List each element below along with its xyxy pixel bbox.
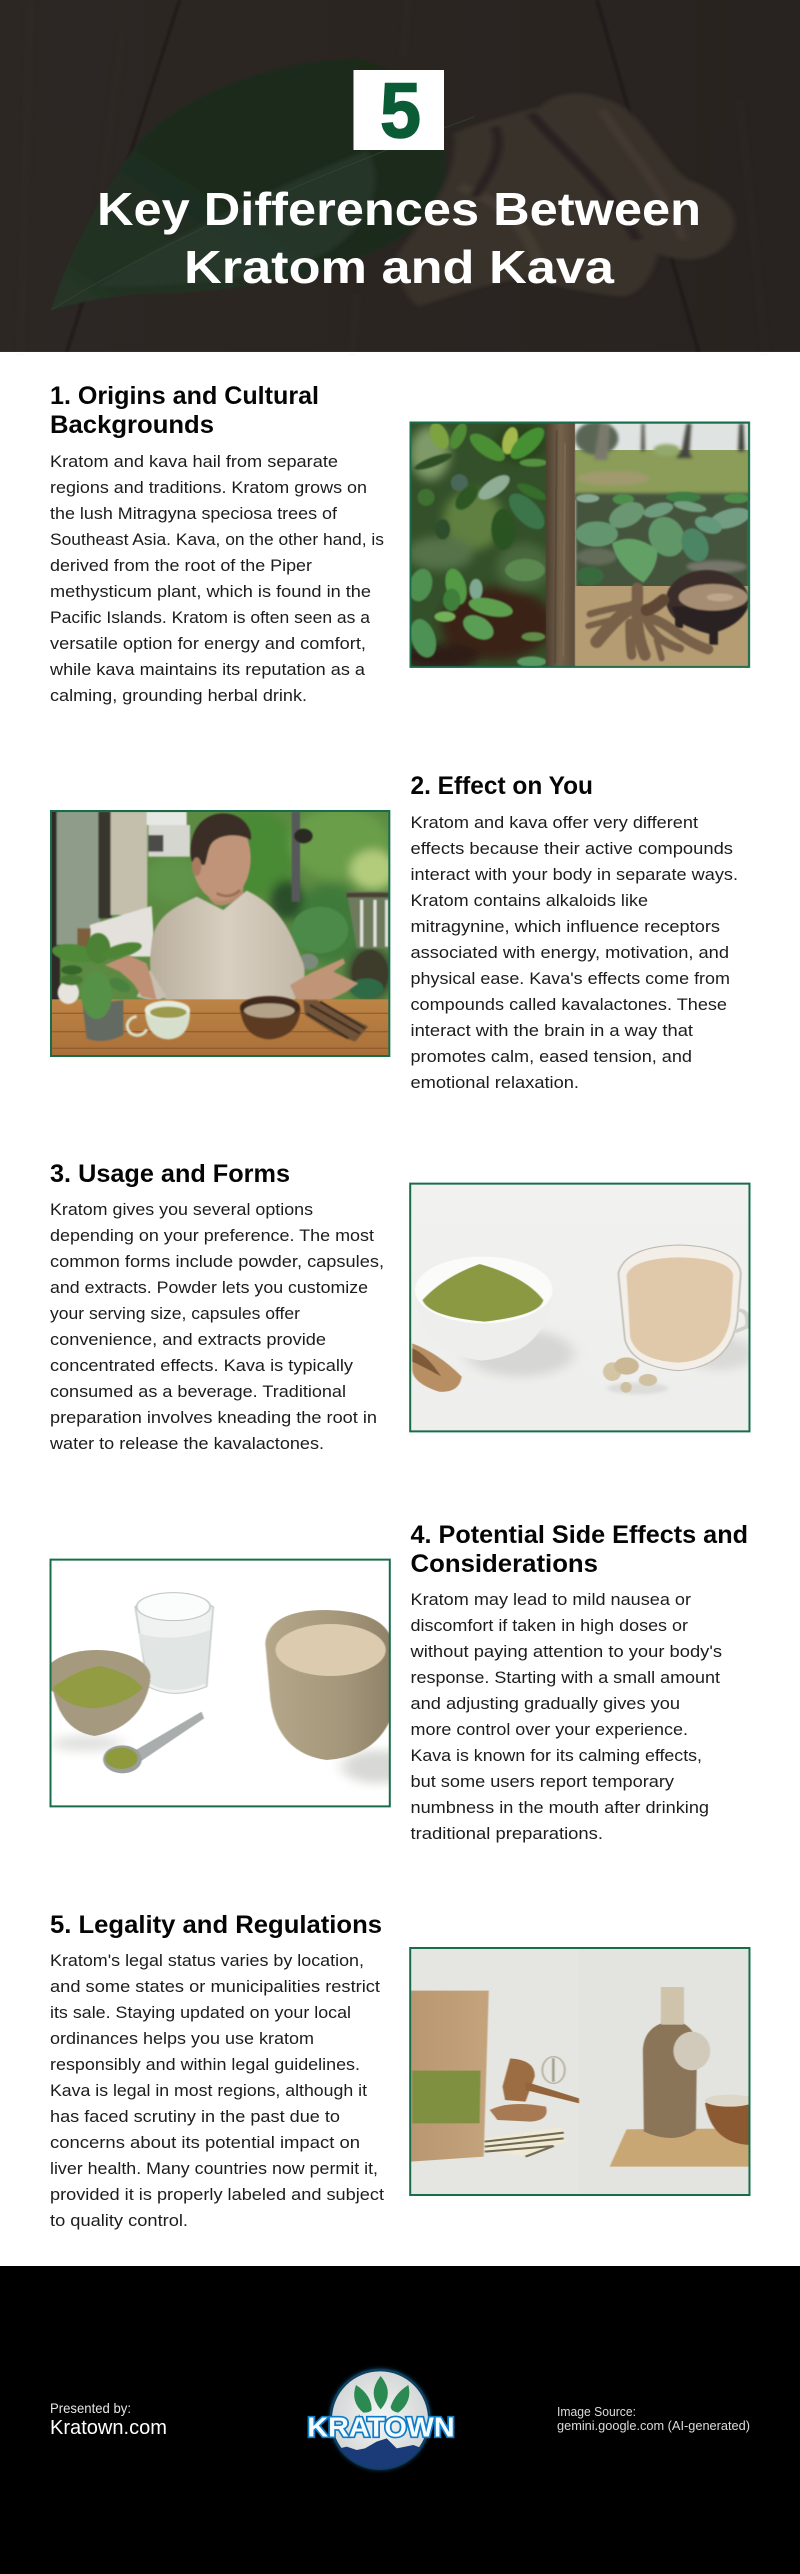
heading 1: Backgrounds — [50, 411, 214, 439]
body text 2: interact with your body in separate ways. — [410, 865, 738, 884]
body text 1: the lush Mitragyna speciosa trees of — [50, 504, 337, 523]
body text 3: your serving size, capsules offer — [50, 1304, 300, 1323]
body text 1: regions and traditions. Kratom grows on — [50, 478, 367, 497]
title: Key Differences Between — [97, 183, 701, 235]
body text 4: more control over your experience. — [410, 1720, 688, 1739]
body text 2 — [410, 813, 738, 1092]
heading 2: 2. Effect on You — [410, 772, 593, 800]
body text 2: promotes calm, eased tension, and — [410, 1047, 692, 1066]
body text 4: Kava is known for its calming effects, — [410, 1746, 702, 1765]
body text 1: Southeast Asia. Kava, on the other hand, is — [50, 530, 384, 549]
presented by — [50, 2400, 167, 2439]
body text 3: water to release the kavalactones. — [49, 1434, 324, 1453]
body text 1 — [49, 452, 384, 705]
banner photo: leaf and root on dark wood — [0, 0, 800, 354]
section 5: legality and regulations — [50, 1911, 754, 2230]
body text 5: has faced scrutiny in the past due to — [50, 2107, 340, 2126]
section 4: potential side effects and considerations — [43, 1521, 748, 1843]
image source: Image Source: — [557, 2404, 636, 2419]
heading 4: 4. Potential Side Effects and — [410, 1521, 748, 1549]
header banner — [0, 0, 800, 354]
body text 4: discomfort if taken in high doses or — [410, 1616, 688, 1635]
body text 3: and extracts. Powder lets you customize — [50, 1278, 368, 1297]
body text 5: Kava is legal in most regions, although it — [50, 2081, 367, 2100]
title: Kratom and Kava — [184, 241, 614, 293]
body text 2: emotional relaxation. — [410, 1073, 579, 1092]
image 5: kratom pouch, gavel, scales, kava bottle and bowl — [410, 1948, 754, 2195]
heading 1: 1. Origins and Cultural — [50, 382, 319, 410]
body text 5: concerns about its potential impact on — [50, 2133, 360, 2152]
heading 4: Considerations — [410, 1550, 598, 1578]
body text 3: consumed as a beverage. Traditional — [50, 1382, 346, 1401]
body text 2: physical ease. Kava's effects come from — [410, 969, 730, 988]
image source: gemini.google.com (AI-generated) — [557, 2418, 750, 2433]
body text 5: ordinances helps you use kratom — [50, 2029, 314, 2048]
body text 1: versatile option for energy and comfort, — [50, 634, 366, 653]
body text 4: and adjusting gradually gives you — [410, 1694, 680, 1713]
logo: Kratown: KRATOWN — [307, 2412, 455, 2443]
body text 3: concentrated effects. Kava is typically — [50, 1356, 354, 1375]
body text 4: traditional preparations. — [410, 1824, 603, 1843]
body text 5 — [50, 1951, 384, 2230]
body text 3: preparation involves kneading the root in — [50, 1408, 377, 1427]
title — [97, 183, 701, 293]
body text 4: Kratom may lead to mild nausea or — [410, 1590, 691, 1609]
body text 2: Kratom and kava offer very different — [410, 813, 698, 832]
heading 5: 5. Legality and Regulations — [50, 1911, 382, 1939]
image 3: powder bowl, scoop, kava glass — [410, 1183, 755, 1432]
body text 3 — [49, 1200, 384, 1453]
body text 2: Kratom contains alkaloids like — [410, 891, 648, 910]
body text 2: associated with energy, motivation, and — [410, 943, 729, 962]
body text 5: Kratom's legal status varies by location, — [50, 1951, 364, 1970]
body text 2: compounds called kavalactones. These — [410, 995, 727, 1014]
image source — [557, 2404, 750, 2433]
body text 3: Kratom gives you several options — [50, 1200, 313, 1219]
body text 3: depending on your preference. The most — [50, 1226, 374, 1245]
badge: number 5: 5 — [380, 66, 421, 154]
presented by: Presented by: — [50, 2400, 131, 2416]
body text 5: provided it is properly labeled and subject — [50, 2185, 384, 2204]
body text 5: liver health. Many countries now permit it, — [50, 2159, 378, 2178]
body text 1: Kratom and kava hail from separate — [50, 452, 338, 471]
body text 3: common forms include powder, capsules, — [50, 1252, 384, 1271]
body text 2: interact with the brain in a way that — [410, 1021, 693, 1040]
body text 1: calming, grounding herbal drink. — [50, 686, 307, 705]
image 4: powder bowl, water glass, spoon, kava cup — [43, 1559, 413, 1807]
body text 5: its sale. Staying updated on your local — [50, 2003, 351, 2022]
body text 4: response. Starting with a small amount — [410, 1668, 720, 1687]
badge: number 5 — [354, 66, 444, 154]
heading 1 — [50, 382, 319, 439]
image 2: man at table with kratom plant, tea and kava bowl — [50, 807, 397, 1057]
body text 5: to quality control. — [50, 2211, 188, 2230]
body text 2: effects because their active compounds — [410, 839, 733, 858]
body text 4: numbness in the mouth after drinking — [410, 1798, 709, 1817]
body text 4 — [409, 1590, 722, 1843]
body text 1: derived from the root of the Piper — [50, 556, 312, 575]
body text 1: methysticum plant, which is found in the — [50, 582, 371, 601]
body text 3: convenience, and extracts provide — [50, 1330, 326, 1349]
image 1: kratom forest and kava plants with root and bowl — [400, 420, 752, 670]
section 3: usage and forms — [49, 1160, 755, 1453]
logo: Kratown — [307, 2368, 455, 2473]
body text 4: but some users report temporary — [410, 1772, 675, 1791]
body text 1: Pacific Islands. Kratom is often seen as a — [50, 608, 371, 627]
heading 3: 3. Usage and Forms — [50, 1160, 290, 1188]
body text 4: without paying attention to your body's — [409, 1642, 722, 1661]
footer — [0, 2266, 800, 2574]
body text 1: while kava maintains its reputation as a — [49, 660, 366, 679]
heading 4 — [410, 1521, 748, 1578]
body text 5: responsibly and within legal guidelines. — [50, 2055, 360, 2074]
presented by: Kratown.com — [50, 2417, 167, 2439]
body text 2: mitragynine, which influence receptors — [410, 917, 720, 936]
section 1: origins and cultural backgrounds — [49, 382, 752, 705]
section 2: effect on you — [50, 772, 738, 1092]
body text 5: and some states or municipalities restrict — [50, 1977, 380, 1996]
